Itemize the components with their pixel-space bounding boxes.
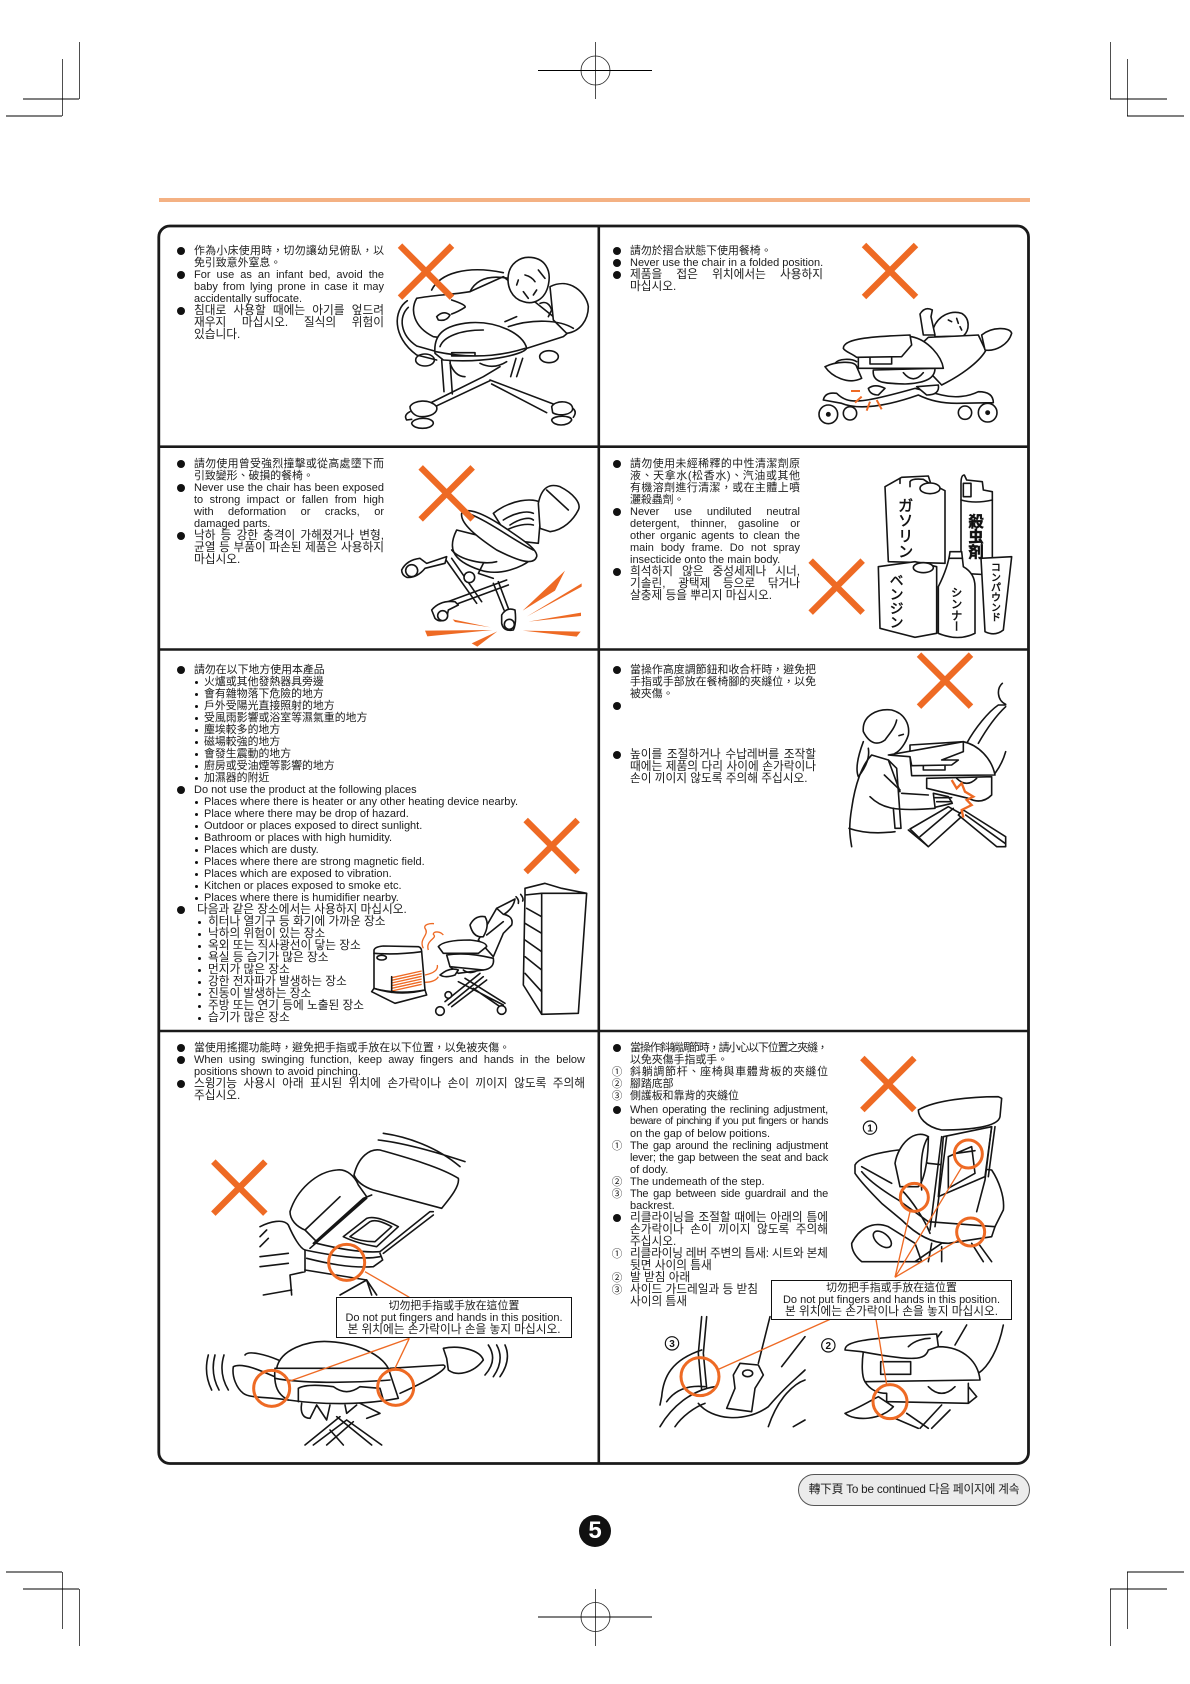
illustration: chair between heater and bookshelf with X	[370, 818, 588, 1016]
text: solvent warning: 기솔린, 광택제 등으로 닦거나	[630, 577, 800, 590]
text: swing warning: positions shown to avoid pinching.	[194, 1066, 361, 1078]
text: places list: 受風雨影響或浴室等濕氣重的地方	[204, 712, 367, 724]
text: reclining warning: backrest.	[630, 1200, 675, 1212]
illustration: reclining chair views with numbered pinch circles: 1	[867, 1123, 873, 1134]
text: prone warning: 침대로 사용할 때에는 아기를 엎드려	[194, 304, 384, 317]
callout: do not put fingers (right)	[771, 1280, 1012, 1320]
text: places list: Place where there may be drop of hazard.	[204, 808, 409, 820]
text: damaged chair warning: 請勿使用曾受強烈撞擊或從高處墮下而	[194, 458, 384, 470]
text: solvent warning: insecticide onto the main body.	[630, 554, 780, 566]
panel: do not use when folded	[613, 242, 1012, 424]
text: solvent warning: 灑殺蟲劑。	[630, 494, 684, 506]
text: places list: 加濕器的附近	[204, 772, 269, 784]
text: reclining warning: on the gap of below poitions.	[630, 1128, 770, 1140]
text: reclining warning: When operating the reclining adjustment,	[630, 1104, 828, 1116]
panel: reclining pinch warning: ③	[612, 1282, 622, 1297]
illustration: solvent containers with X: シンナー	[949, 587, 965, 632]
text: reclining warning: 側護板和靠背的夾縫位	[630, 1090, 739, 1102]
text: solvent warning: 희석하지 않은 중성세제나 시너,	[630, 565, 800, 578]
panel: places not to use	[177, 664, 588, 1024]
text: places list: Do not use the product at the following places	[194, 784, 417, 796]
text: reclining warning: The undemeath of the step.	[630, 1176, 765, 1188]
text: places list: 會有雜物落下危險的地方	[204, 688, 324, 700]
text: places list: Places where there are strong magnetic field.	[204, 856, 425, 868]
text: damaged chair warning: 마십시오.	[194, 553, 240, 566]
text: reclining warning: 사이의 틈새	[630, 1295, 687, 1308]
panel: do not use damaged chair	[177, 458, 582, 647]
text: reclining warning: 當操作斜躺調節時，請小心以下位置之夾縫，	[630, 1042, 827, 1054]
text: places list: 먼지가 많은 장소	[208, 963, 290, 976]
text: swing warning	[177, 1042, 585, 1102]
text: folded warning: 請勿於摺合狀態下使用餐椅。	[630, 245, 772, 257]
text: prone warning: For use as an infant bed, avoid the	[194, 269, 384, 281]
panel: do not use solvents	[613, 458, 1012, 638]
text: places list: Outdoor or places exposed to direct sunlight.	[204, 820, 422, 832]
text: prone warning: 있습니다.	[194, 328, 240, 341]
text: prone warning: baby from lying prone in case it may	[194, 281, 384, 293]
text: height adjustment warning: 手指或手部放在餐椅腳的夾縫位，以免	[630, 676, 816, 688]
text: reclining warning: The gap between side guardrail and the	[630, 1188, 828, 1200]
illustration: solvent containers with X: コンパウンド	[988, 562, 1004, 622]
text: damaged chair warning: 낙하 등 강한 충격이 가해졌거나 변형,	[194, 529, 384, 542]
text: reclining warning: of dody.	[630, 1164, 668, 1176]
text: reclining warning: 발 받침 아래	[630, 1271, 690, 1284]
text: reclining warning	[612, 1042, 828, 1308]
text: places list: 진동이 발생하는 장소	[208, 987, 311, 1000]
text: reclining warning: 주십시오.	[630, 1235, 676, 1248]
page number badge: 5	[588, 1517, 602, 1544]
text: places list: 낙하의 위험이 있는 장소	[208, 927, 325, 940]
callout: do not put fingers: 切勿把手指或手放在這位置	[389, 1300, 519, 1312]
text: reclining warning: 뒷면 사이의 틈새	[630, 1259, 712, 1272]
panel: reclining pinch warning: ①	[612, 1138, 622, 1153]
callout: do not put fingers	[336, 1297, 572, 1338]
text: places list: Places which are exposed to vibration.	[204, 868, 392, 880]
text: damaged chair warning: damaged parts.	[194, 518, 270, 530]
callout: do not put fingers (right): 본 위치에는 손가락이나 손을 놓지 마십시오.	[785, 1305, 998, 1318]
text: damaged chair warning: to strong impact or fallen from high	[194, 494, 384, 506]
callout: do not put fingers (right): 切勿把手指或手放在這位置	[826, 1282, 957, 1294]
text: solvent warning: other organic agents to clean the	[630, 530, 800, 542]
text: places list: 戶外受陽光直接照射的地方	[204, 700, 335, 712]
text: damaged chair warning: 引致變形、破損的餐椅。	[194, 470, 314, 482]
text: places list: 주방 또는 연기 등에 노출된 장소	[208, 999, 364, 1012]
text: places list	[177, 664, 518, 1024]
text: swing warning: 當使用搖擺功能時，避免把手指或手放在以下位置，以免被夾傷。	[194, 1042, 510, 1054]
text: reclining warning: 腳踏底部	[630, 1078, 674, 1090]
text: places list: 塵埃較多的地方	[204, 724, 280, 736]
text: reclining warning: The gap around the reclining adjustment	[630, 1140, 828, 1152]
text: solvent warning: detergent, thinner, gasoline or	[630, 518, 800, 530]
text: places list: Places where there is heater or any other heating device nearby.	[204, 796, 518, 808]
text: places list: 磁場較強的地方	[204, 736, 280, 748]
callout: do not put fingers: Do not put fingers and hands in this position.	[345, 1312, 563, 1324]
text: places list: Places which are dusty.	[204, 844, 319, 856]
text: solvent warning: 살충제 등을 뿌리지 마십시오.	[630, 589, 772, 602]
text: reclining warning: 以免夾傷手指或手。	[630, 1054, 728, 1066]
panel: reclining pinch warning: ②	[612, 1174, 622, 1189]
text: places list: 히터나 열기구 등 화기에 가까운 장소	[208, 915, 386, 928]
illustration: reclining chair views with numbered pinch circles: 2	[826, 1341, 832, 1352]
text: prone warning: accidentally suffocate.	[194, 293, 302, 305]
panel: reclining pinch warning: ③	[612, 1088, 622, 1103]
text: height adjustment warning: 被夾傷。	[630, 688, 674, 700]
text: folded warning: 제품을 접은 위치에서는 사용하지	[630, 268, 823, 281]
panel: reclining pinch warning: ②	[612, 1270, 622, 1285]
text: height adjustment warning: 손이 끼이지 않도록 주의해 주십시오.	[630, 772, 808, 785]
text: solvent warning: Never use undiluted neutral	[630, 506, 800, 518]
illustration: solvent containers with X: ベンジン	[887, 573, 907, 629]
text: damaged chair warning: 균열 등 부품이 파손된 제품은 사용하지	[194, 541, 384, 554]
panel: reclining pinch warning: ③	[612, 1186, 622, 1201]
panel: do not let infant lie prone	[177, 243, 590, 430]
text: height adjustment warning	[613, 664, 816, 785]
text: places list: Bathroom or places with high humidity.	[204, 832, 392, 844]
illustration: woman adjusting chair height with X	[848, 652, 1006, 848]
text: places list: 會發生震動的地方	[204, 748, 291, 760]
text: damaged chair warning: Never use the chair has been exposed	[194, 482, 384, 494]
text: folded warning: 마십시오.	[630, 280, 676, 293]
text: places list: 廚房或受油煙等影響的地方	[204, 760, 335, 772]
text: reclining warning: 리클라이닝을 조절할 때에는 아래의 틈에	[630, 1211, 828, 1224]
text: damaged chair warning	[177, 458, 384, 566]
orange header rule	[159, 198, 1030, 202]
text: swing warning: 스윙기능 사용시 아래 표시된 위치에 손가락이나 손이 끼이지 않도록 주의해	[194, 1077, 585, 1090]
text: places list: 옥외 또는 직사광선이 닿는 장소	[208, 939, 361, 952]
text: prone warning	[177, 244, 384, 341]
illustration: reclining chair views with numbered pinch circles: 3	[669, 1339, 675, 1350]
text: places list: 다음과 같은 장소에서는 사용하지 마십시오.	[197, 903, 407, 916]
text: height adjustment warning: 높이를 조절하거나 수납레버를 조작할	[630, 748, 816, 761]
text: prone warning: 재우지 마십시오. 질식의 위험이	[194, 316, 384, 329]
panel: swing function pinch warning	[177, 1042, 585, 1446]
text: swing warning: 주십시오.	[194, 1089, 240, 1102]
illustration: solvent containers with X	[808, 474, 1012, 638]
text: folded warning	[613, 244, 823, 293]
illustration: swinging chair views with pinch circles	[206, 1132, 508, 1446]
illustration: solvent containers with X: 殺虫剤	[965, 513, 987, 560]
text: solvent warning: 液、天拿水(松香水)、汽油或其他	[630, 470, 800, 482]
continuation pill: 轉下頁 To be continued 다음 페이지에 계속	[809, 1483, 1019, 1496]
panel: reclining pinch warning	[612, 1042, 1012, 1430]
text: reclining warning: 손가락이나 손이 끼이지 않도록 주의해	[630, 1223, 828, 1236]
text: places list: 욕실 등 습기가 많은 장소	[208, 951, 329, 964]
text: reclining warning: lever; the gap between the seat and back	[630, 1152, 828, 1164]
text: reclining warning: 사이드 가드레일과 등 받침	[630, 1283, 758, 1296]
text: folded warning: Never use the chair in a folded position.	[630, 257, 823, 269]
text: solvent warning: 有機溶劑進行清潔，或在主體上噴	[630, 482, 800, 494]
illustration: baby in folded chair with X	[818, 242, 1012, 424]
text: swing warning: When using swinging function, keep away fingers and hands in the below	[194, 1054, 585, 1066]
text: solvent warning: main body frame. Do not spray	[630, 542, 800, 554]
text: prone warning: 作為小床使用時，切勿讓幼兒俯臥，以	[194, 245, 384, 257]
panel: reclining pinch warning: ①	[612, 1064, 622, 1079]
continuation pill	[798, 1474, 1030, 1506]
panel: reclining pinch warning: ②	[612, 1076, 622, 1091]
text: height adjustment warning: 때에는 제품의 다리 사이에 손가락이나	[630, 760, 816, 773]
text: solvent warning: 請勿使用未經稀釋的中性清潔劑原	[630, 458, 800, 470]
callout: do not put fingers (right): Do not put fingers and hands in this position.	[783, 1294, 1000, 1306]
text: places list: 습기가 많은 장소	[208, 1011, 290, 1024]
callout: do not put fingers: 본 위치에는 손가락이나 손을 놓지 마십시오.	[347, 1323, 561, 1336]
warning table frame	[157, 224, 1030, 1465]
text: places list: 강한 전자파가 발생하는 장소	[208, 975, 347, 988]
panel: reclining pinch warning: ①	[612, 1246, 622, 1261]
text: damaged chair warning: with deformation or cracks, or	[194, 506, 384, 518]
illustration: solvent containers with X: ガソリン	[895, 497, 917, 559]
page number badge	[579, 1515, 611, 1547]
illustration: reclining chair views with numbered pinch circles	[659, 1056, 1004, 1430]
text: places list: 火爐或其他發熱器具旁邊	[204, 676, 324, 688]
text: places list: 請勿在以下地方使用本產品	[194, 664, 325, 676]
text: solvent warning	[613, 458, 800, 602]
illustration: baby prone in chair with X	[396, 243, 590, 430]
text: reclining warning: 리클라이닝 레버 주변의 틈새: 시트와 본체	[630, 1247, 828, 1260]
text: places list: Kitchen or places exposed to smoke etc.	[204, 880, 402, 892]
text: height adjustment warning: 當操作高度調節鈕和收合杆時，避免把	[630, 664, 816, 676]
illustration: falling chair with impact bursts	[400, 465, 582, 647]
text: reclining warning: 斜躺調節杆、座椅與車體背板的夾縫位	[630, 1066, 828, 1078]
text: prone warning: 免引致意外窒息。	[194, 257, 281, 269]
panel: height adjustment pinch warning	[613, 652, 1006, 848]
text: places list: Places where there is humidifier nearby.	[204, 892, 399, 904]
text: reclining warning: beware of pinching if you put fingers or hands	[630, 1116, 828, 1127]
